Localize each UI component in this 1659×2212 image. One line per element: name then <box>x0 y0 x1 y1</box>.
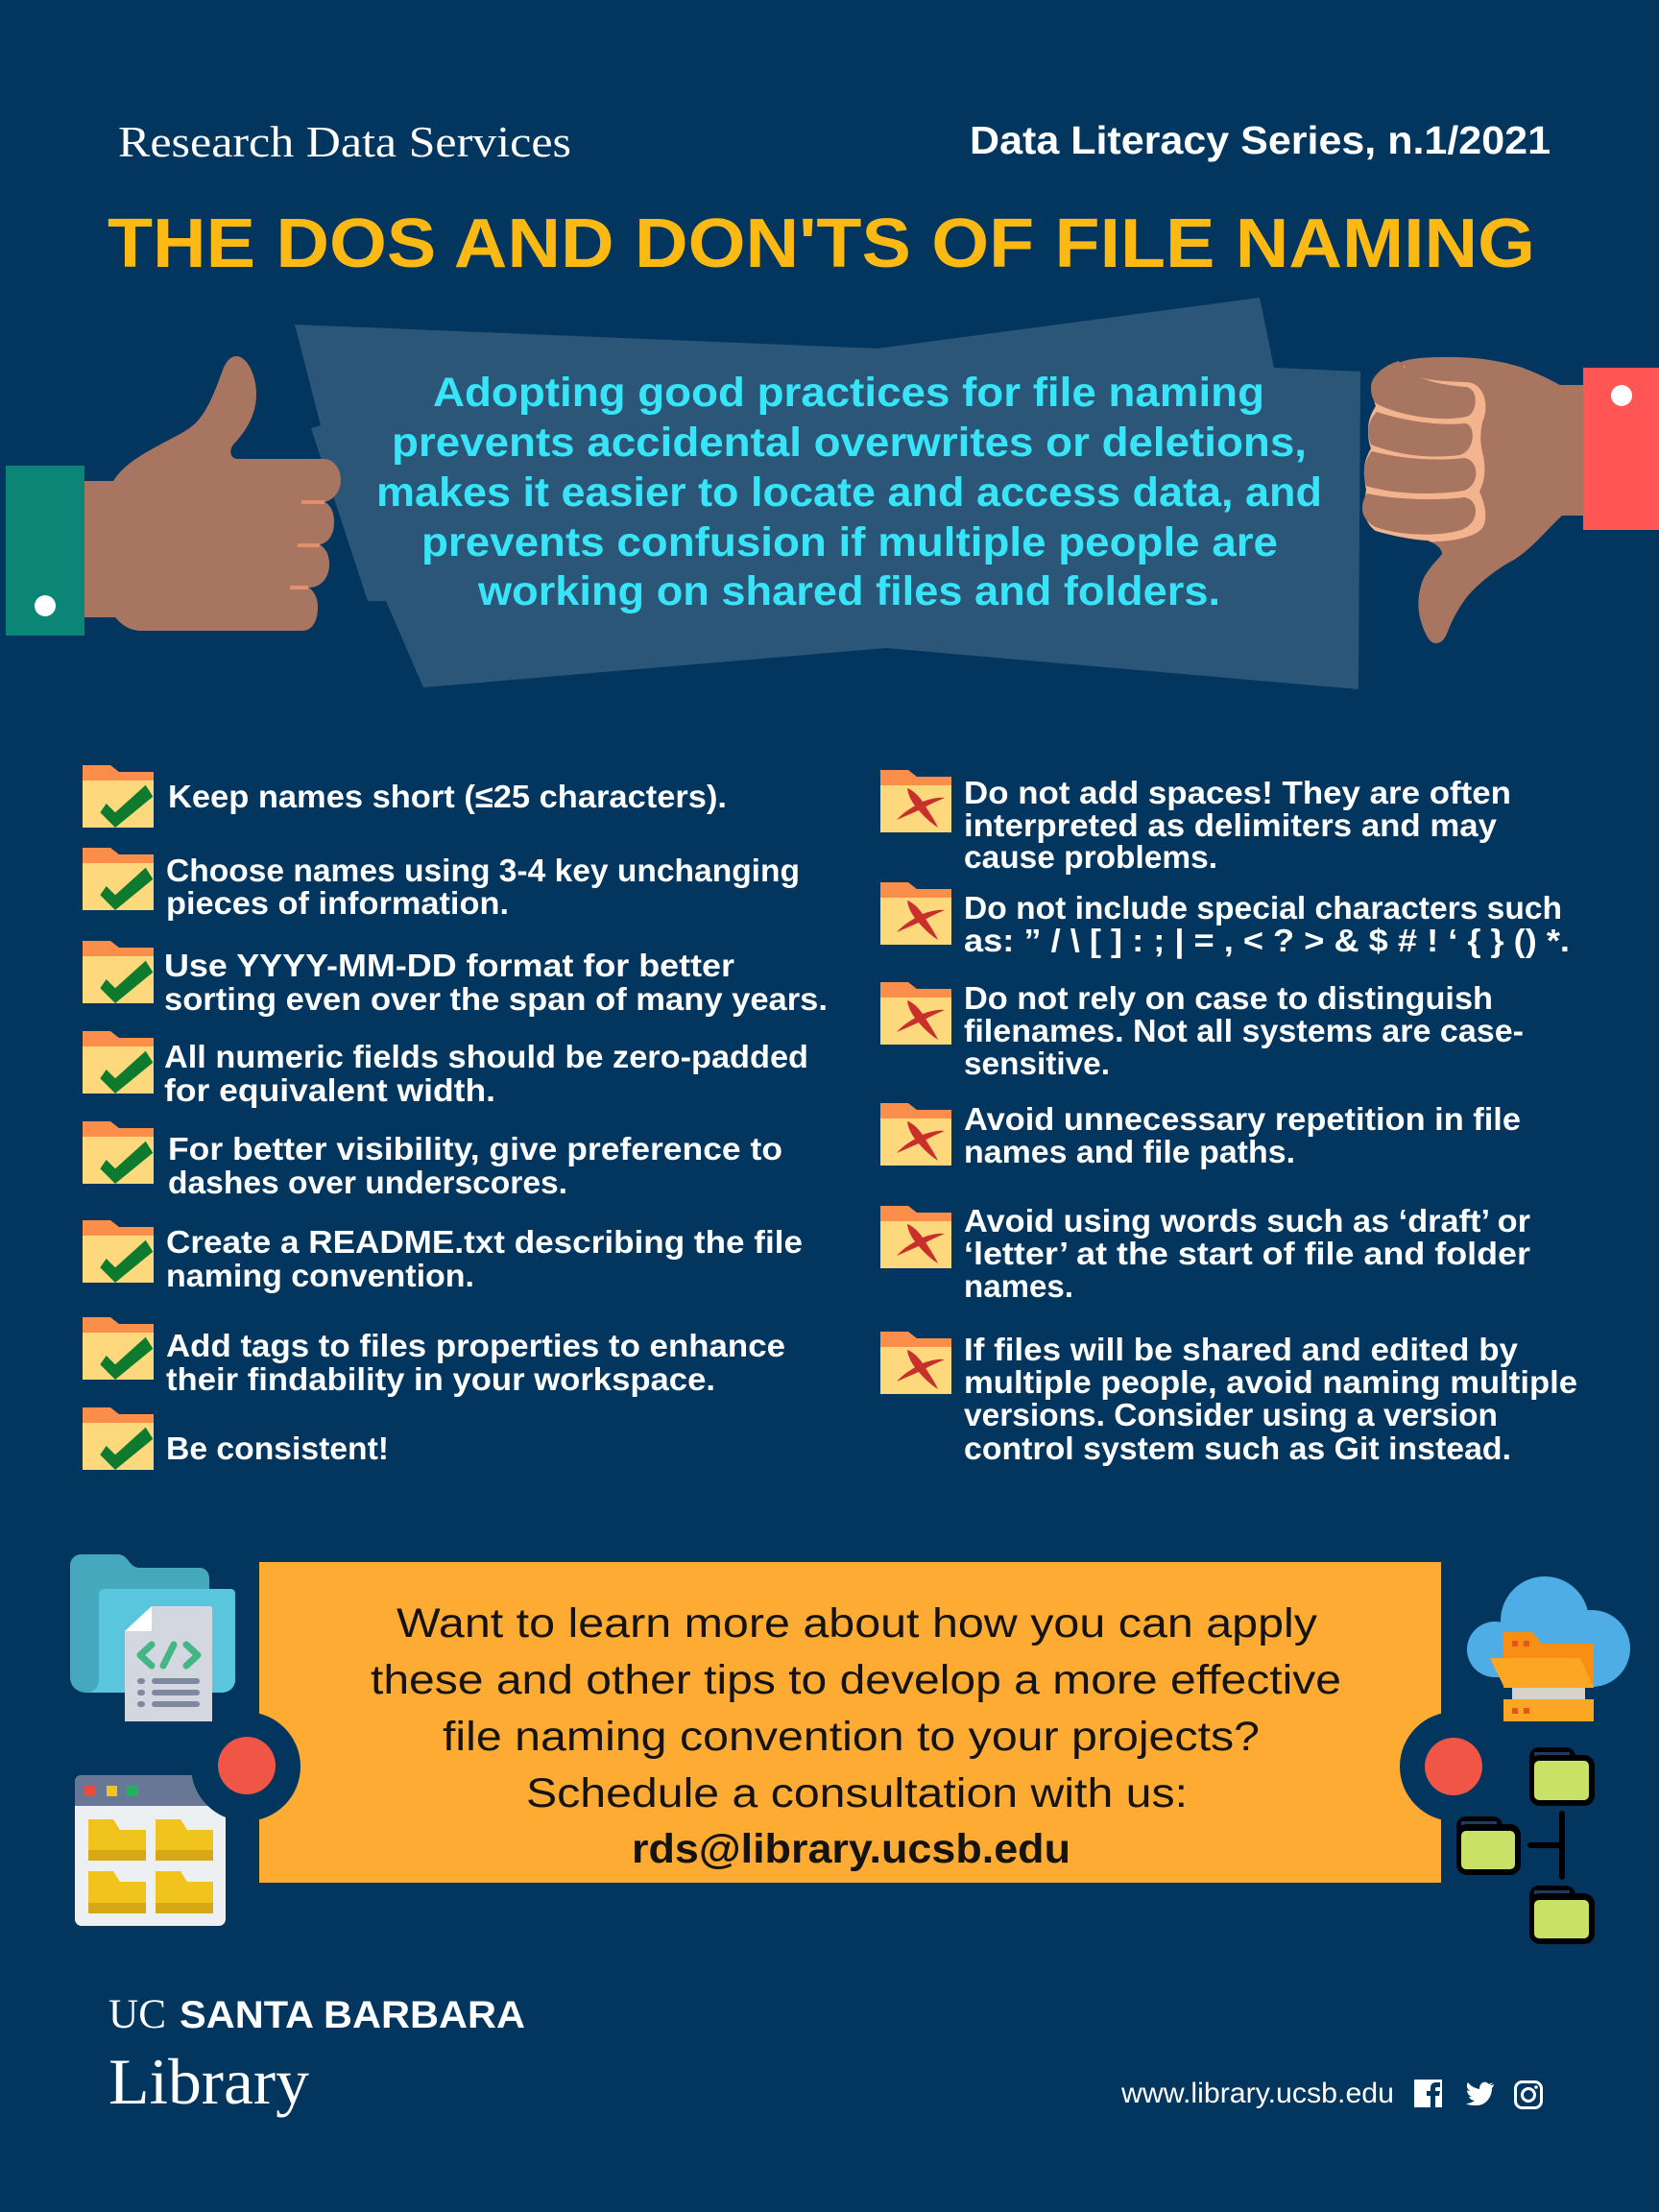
do item: readme <box>83 1220 803 1293</box>
do item: dashes: For better visibility, give preference to <box>168 1131 782 1166</box>
do item: zero padding: All numeric fields should be zero-padded <box>164 1039 808 1074</box>
intro text <box>376 370 1322 614</box>
intro text: prevents accidental overwrites or deletions, <box>392 420 1307 466</box>
dont item: spaces: cause problems. <box>964 839 1217 875</box>
intro text: Adopting good practices for file naming <box>433 370 1264 416</box>
header: series label: Data Literacy Series, n.1/2021 <box>970 118 1551 162</box>
do item: keep names short: Keep names short (≤25 characters). <box>168 779 727 814</box>
dont item: special characters: Do not include special characters such <box>964 890 1562 926</box>
call to action text <box>371 1600 1341 1872</box>
icon: facebook <box>1414 2080 1442 2107</box>
do item: be consistent: Be consistent! <box>166 1431 389 1466</box>
call to action text: Schedule a consultation with us: <box>526 1770 1188 1816</box>
dont item: special characters: as: ” / \ [ ] : ; | = , < ? > & $ # ! ‘ { } () *. <box>964 923 1570 958</box>
do item: date format: Use YYYY-MM-DD format for better <box>164 948 734 983</box>
do item: choose names: Choose names using 3-4 key unchanging <box>166 853 800 888</box>
dont item: versions: If files will be shared and edited by <box>964 1332 1519 1367</box>
intro text: working on shared files and folders. <box>477 568 1220 614</box>
footer: uc santa barbara logo: SANTA BARBARA <box>180 1994 525 2036</box>
do item: readme: naming convention. <box>166 1258 474 1293</box>
dont item: special characters <box>880 882 1570 958</box>
dont item: spaces: Do not add spaces! They are often <box>964 775 1511 810</box>
icon: thumbs down hand <box>1362 357 1659 643</box>
call to action text: Want to learn more about how you can apply <box>397 1600 1318 1647</box>
panel: dos list <box>83 765 828 1470</box>
icon: code file in folder <box>70 1554 235 1721</box>
do item: dashes: dashes over underscores. <box>168 1165 567 1200</box>
dont item: versions: control system such as Git instead. <box>964 1431 1511 1466</box>
icon: folder window <box>75 1775 226 1926</box>
footer: website: www.library.ucsb.edu <box>1120 2078 1394 2109</box>
call to action text: file naming convention to your projects? <box>443 1714 1260 1760</box>
intro text: makes it easier to locate and access data, and <box>376 469 1322 516</box>
do item: be consistent <box>83 1407 389 1470</box>
do item: keep names short <box>83 765 727 828</box>
dont item: repetition <box>880 1101 1521 1169</box>
dont item: versions <box>880 1332 1577 1466</box>
call to action text: these and other tips to develop a more effective <box>371 1657 1341 1703</box>
do item: date format: sorting even over the span of many years. <box>164 981 828 1017</box>
do item: zero padding <box>83 1031 808 1108</box>
icon: thumbs up hand <box>6 356 341 636</box>
intro text: prevents confusion if multiple people are <box>421 519 1278 565</box>
dont item: repetition: Avoid unnecessary repetition in file <box>964 1101 1521 1137</box>
notch: left connector <box>191 1712 301 1821</box>
dont item: draft: ‘letter’ at the start of file and folder <box>964 1236 1530 1271</box>
do item: tags <box>83 1317 785 1397</box>
icon: folder tree <box>1456 1747 1595 1944</box>
panel: don'ts list <box>880 770 1577 1466</box>
dont item: versions: versions. Consider using a version <box>964 1397 1498 1432</box>
dont item: repetition: names and file paths. <box>964 1134 1295 1169</box>
do item: choose names: pieces of information. <box>166 885 509 921</box>
do item: date format <box>83 941 828 1017</box>
icon: twitter <box>1466 2082 1494 2105</box>
do item: dashes <box>83 1121 782 1200</box>
dont item: spaces: interpreted as delimiters and may <box>964 807 1498 843</box>
footer: uc santa barbara logo: Library <box>108 2045 309 2118</box>
do item: choose names <box>83 848 800 921</box>
dont item: versions: multiple people, avoid naming multiple <box>964 1364 1577 1400</box>
header: research data services: Research Data Services <box>118 118 571 166</box>
do item: tags: their findability in your workspace. <box>166 1361 715 1397</box>
footer: uc santa barbara logo <box>108 1992 525 2118</box>
dont item: case: filenames. Not all systems are case- <box>964 1013 1524 1048</box>
title: THE DOS AND DON'TS OF FILE NAMING <box>108 205 1535 282</box>
do item: zero padding: for equivalent width. <box>164 1072 495 1108</box>
notch: right connector <box>1400 1712 1509 1821</box>
dont item: draft: names. <box>964 1268 1073 1304</box>
do item: tags: Add tags to files properties to enhance <box>166 1328 785 1363</box>
footer: uc santa barbara logo: UC <box>108 1992 166 2037</box>
panel: intro speech banner <box>295 298 1360 689</box>
dont item: case: Do not rely on case to distinguish <box>964 980 1493 1016</box>
dont item: spaces <box>880 770 1511 875</box>
panel: call to action box <box>259 1562 1441 1883</box>
dont item: case: sensitive. <box>964 1046 1110 1081</box>
call to action text: rds@library.ucsb.edu <box>632 1826 1070 1872</box>
do item: readme: Create a README.txt describing the file <box>166 1224 803 1260</box>
dont item: draft: Avoid using words such as ‘draft’ or <box>964 1203 1530 1238</box>
icon: instagram <box>1515 2081 1542 2108</box>
icon: cloud folder server <box>1467 1576 1630 1721</box>
dont item: draft <box>880 1203 1530 1304</box>
dont item: case <box>880 980 1524 1081</box>
